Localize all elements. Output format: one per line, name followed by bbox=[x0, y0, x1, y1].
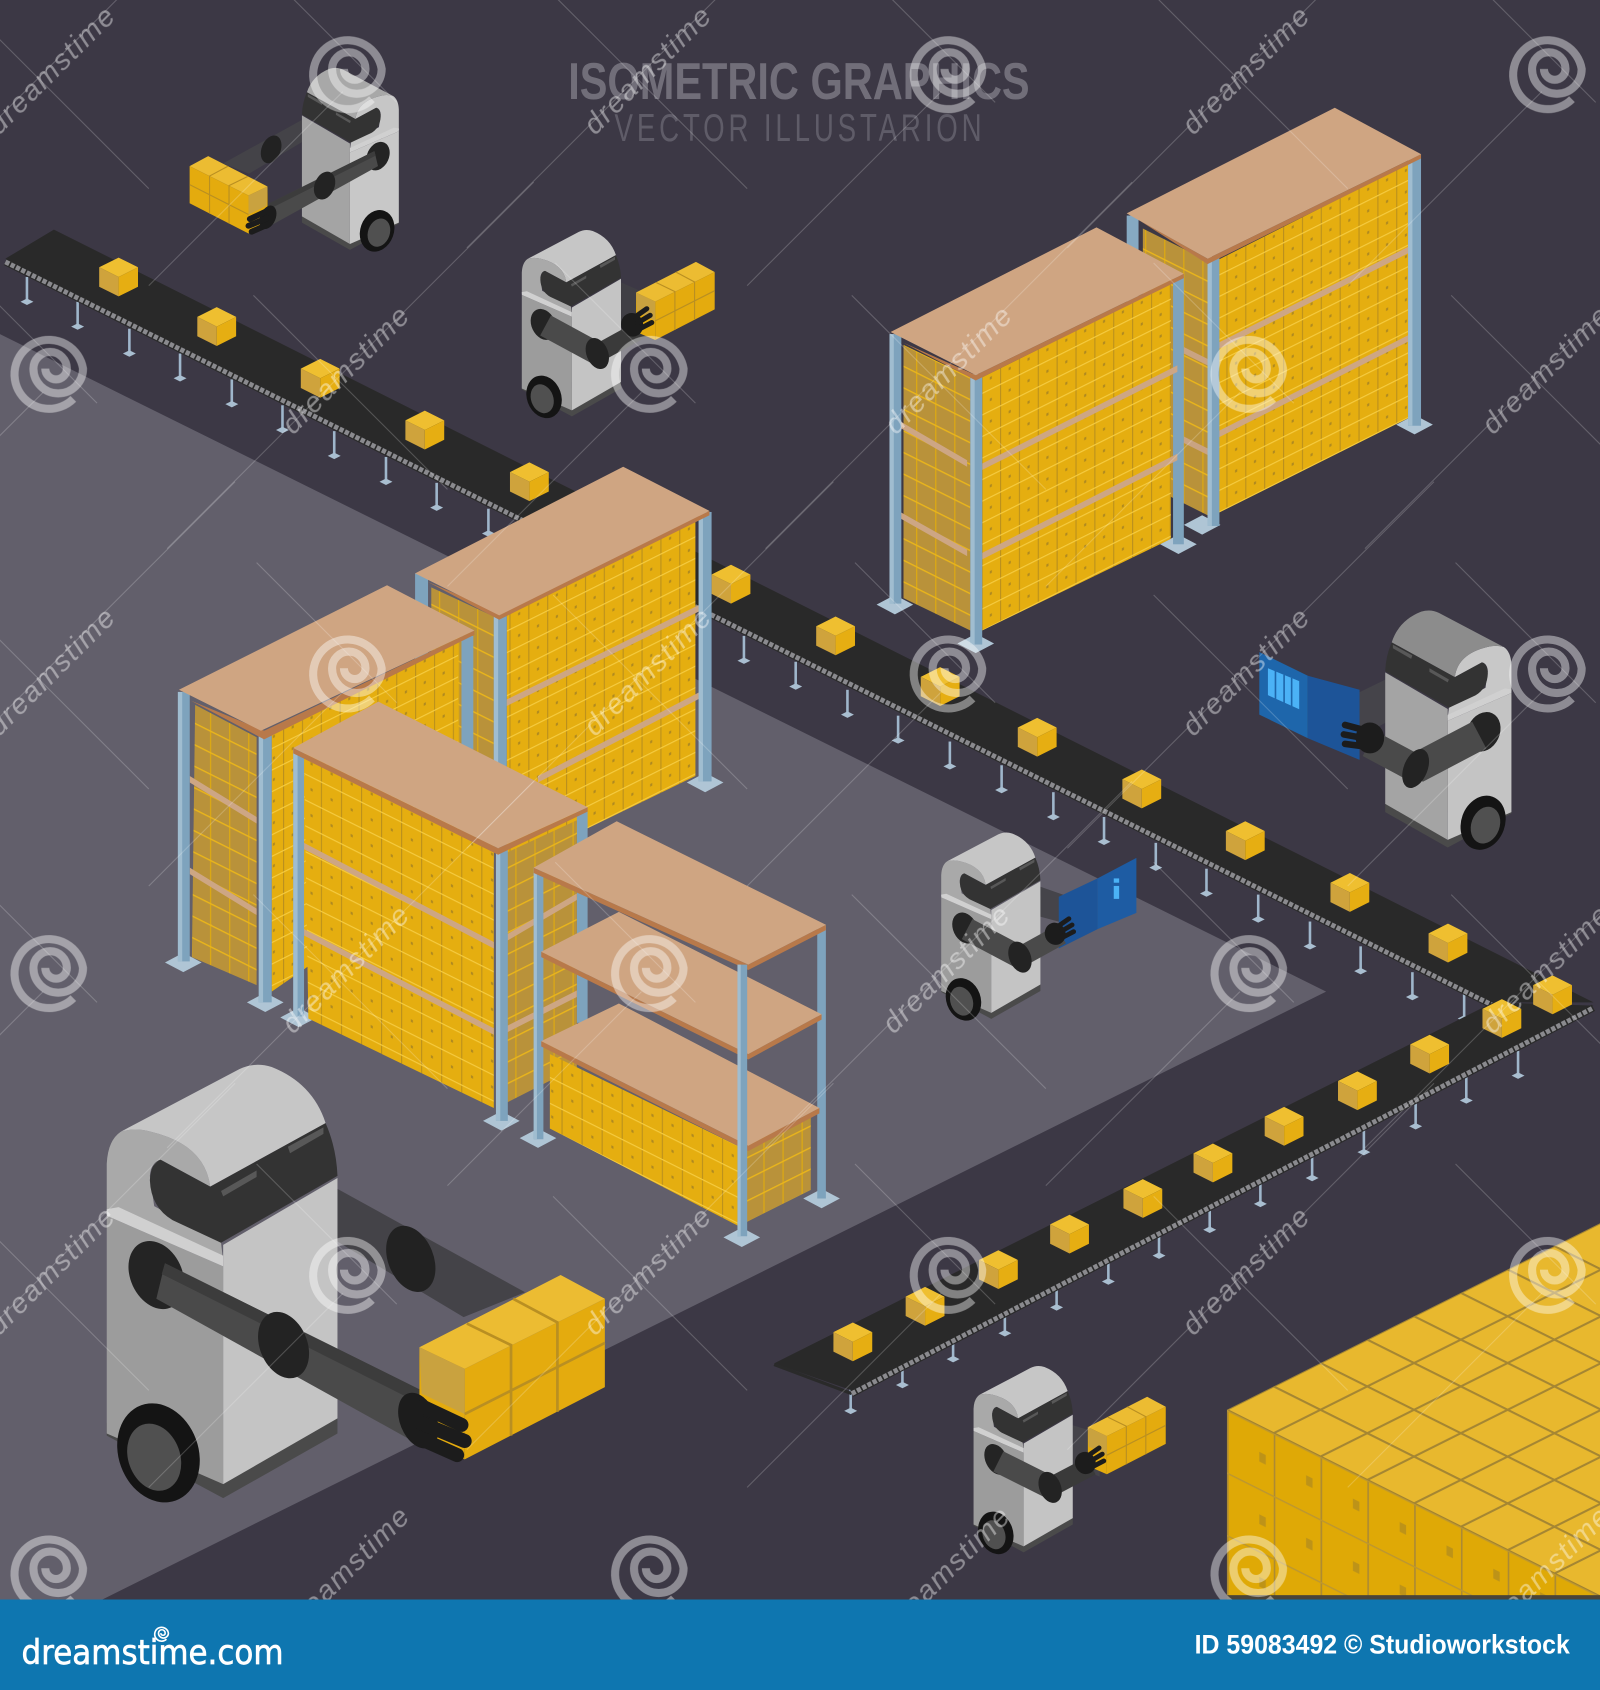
robot: top left carrying boxes bbox=[190, 68, 400, 257]
watermark text: dreamstime bbox=[275, 898, 417, 1040]
watermark text: dreamstime bbox=[1176, 0, 1317, 141]
top shelf board bbox=[534, 821, 826, 970]
robot: right holding tablet bbox=[1259, 610, 1513, 856]
boxes on lowest shelf bbox=[550, 1054, 811, 1225]
shelf rack: centre left bbox=[165, 585, 474, 1012]
watermark text: dreamstime bbox=[275, 1500, 417, 1641]
big box pile bbox=[1227, 1223, 1600, 1599]
parcels on conveyors bbox=[99, 258, 1572, 1361]
footer logo: dreamstime.com bbox=[22, 1633, 284, 1672]
conveyor two legs bbox=[844, 1051, 1525, 1414]
heading text: ISOMETRIC GRAPHICS bbox=[568, 52, 1030, 110]
watermark text: dreamstime bbox=[577, 0, 719, 141]
watermark text: dreamstime bbox=[1176, 601, 1317, 742]
footer band bbox=[0, 1599, 1600, 1690]
conveyor two edge strip bbox=[774, 1008, 1594, 1394]
shelf rack: centre back bbox=[415, 467, 723, 868]
watermark text: dreamstime bbox=[275, 299, 417, 441]
pile top bbox=[1227, 1223, 1600, 1596]
middle shelf board bbox=[541, 912, 822, 1059]
conveyor one legs bbox=[20, 277, 1471, 1022]
conveyor one belt bbox=[5, 230, 1594, 1002]
robot: large foreground carrying boxes bbox=[104, 1065, 605, 1514]
watermark text: dreamstime bbox=[1176, 1200, 1317, 1342]
subheading text: VECTOR ILLUSTARION bbox=[615, 107, 985, 150]
conveyor two belt bbox=[774, 1002, 1594, 1390]
shelf rack: centre front bbox=[280, 702, 588, 1131]
robot: bottom carrying boxes bbox=[972, 1366, 1166, 1559]
shelf rack: front right bbox=[877, 227, 1197, 653]
robot: centre holding tablet bbox=[940, 833, 1136, 1026]
tablet with bar chart bbox=[1259, 652, 1360, 760]
watermark text: dreamstime bbox=[876, 898, 1018, 1040]
conveyor one edge strip bbox=[5, 262, 1493, 1006]
pile side bbox=[1227, 1410, 1600, 1596]
watermark text: dreamstime bbox=[878, 299, 1020, 441]
lit floor area bbox=[0, 334, 1326, 1599]
watermark text: dreamstime bbox=[577, 1200, 719, 1342]
lower shelf board bbox=[541, 1003, 819, 1151]
robot: top centre carrying boxes bbox=[520, 230, 715, 423]
watermark text: dreamstime bbox=[577, 601, 719, 742]
shelf rack: back right bbox=[1127, 108, 1433, 535]
conveyor one bbox=[5, 230, 1594, 1022]
watermark text: dreamstime bbox=[876, 1500, 1018, 1641]
open shelf rack: front bbox=[520, 821, 840, 1247]
conveyor two bbox=[774, 1002, 1594, 1414]
footer credit: ID 59083492 © Studioworkstock bbox=[1195, 1629, 1570, 1659]
title bbox=[568, 52, 1030, 150]
tablet with info sign bbox=[1059, 858, 1136, 948]
